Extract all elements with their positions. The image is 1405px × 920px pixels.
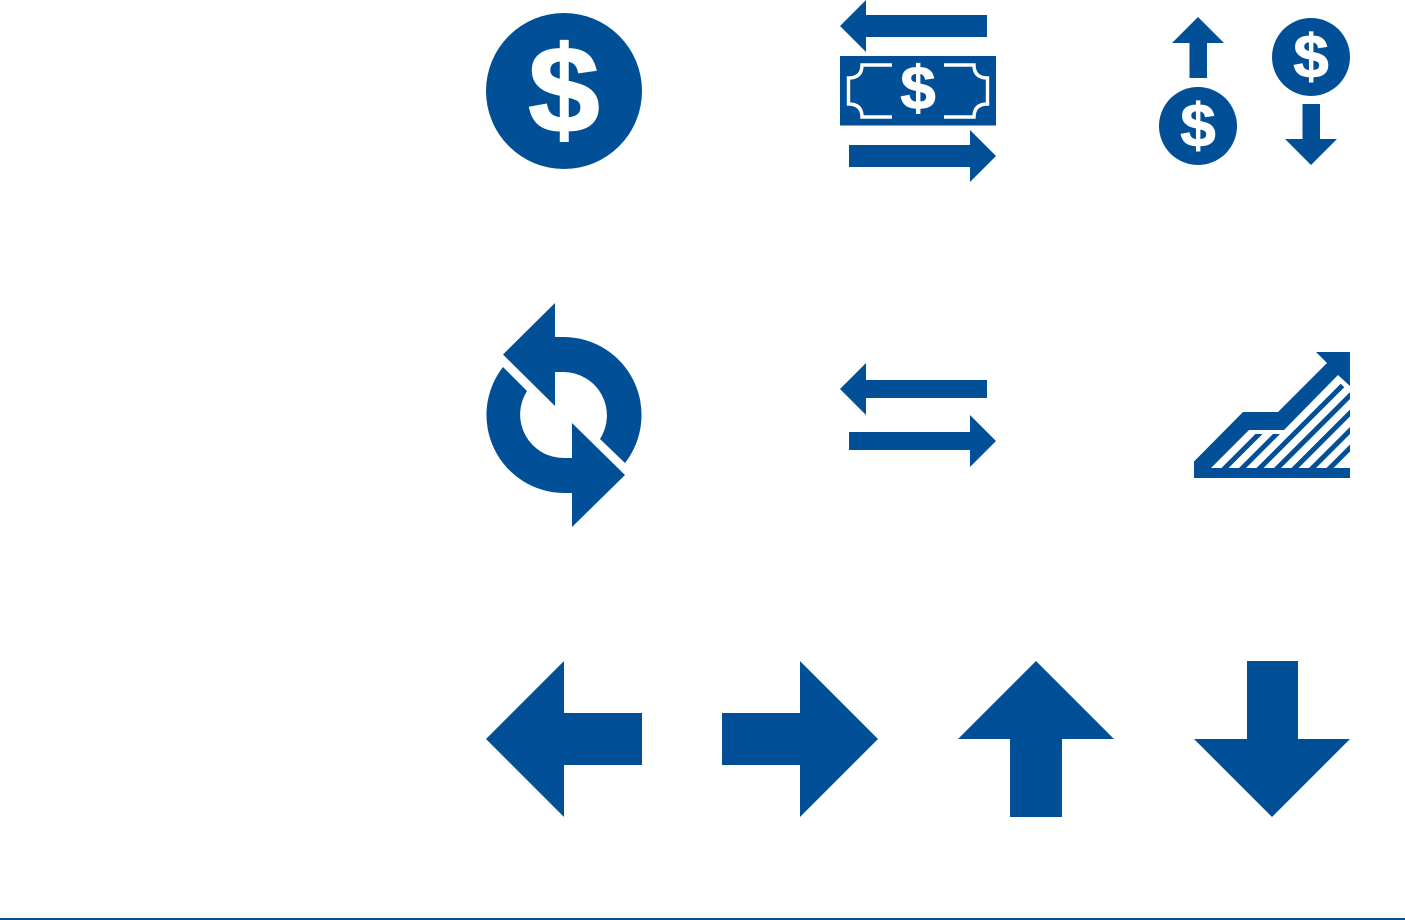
- icon: rising chart: [1194, 352, 1350, 478]
- icon: dollar up and down: $: [1180, 93, 1216, 160]
- icon: banknote with exchange arrows: $: [900, 55, 936, 123]
- icon: dollar coin: $: [528, 20, 600, 158]
- arrow: up: [958, 661, 1114, 817]
- icon: cycle arrows: [486, 303, 642, 527]
- arrow: down: [1194, 661, 1350, 817]
- icon: dollar up and down: [1159, 17, 1350, 165]
- arrow: right: [722, 661, 878, 817]
- icon: exchange arrows: [840, 363, 996, 467]
- icon: dollar coin: [486, 13, 642, 169]
- icon: dollar up and down: $: [1293, 24, 1329, 91]
- icon: banknote with exchange arrows: [840, 0, 996, 182]
- arrow: left: [486, 661, 642, 817]
